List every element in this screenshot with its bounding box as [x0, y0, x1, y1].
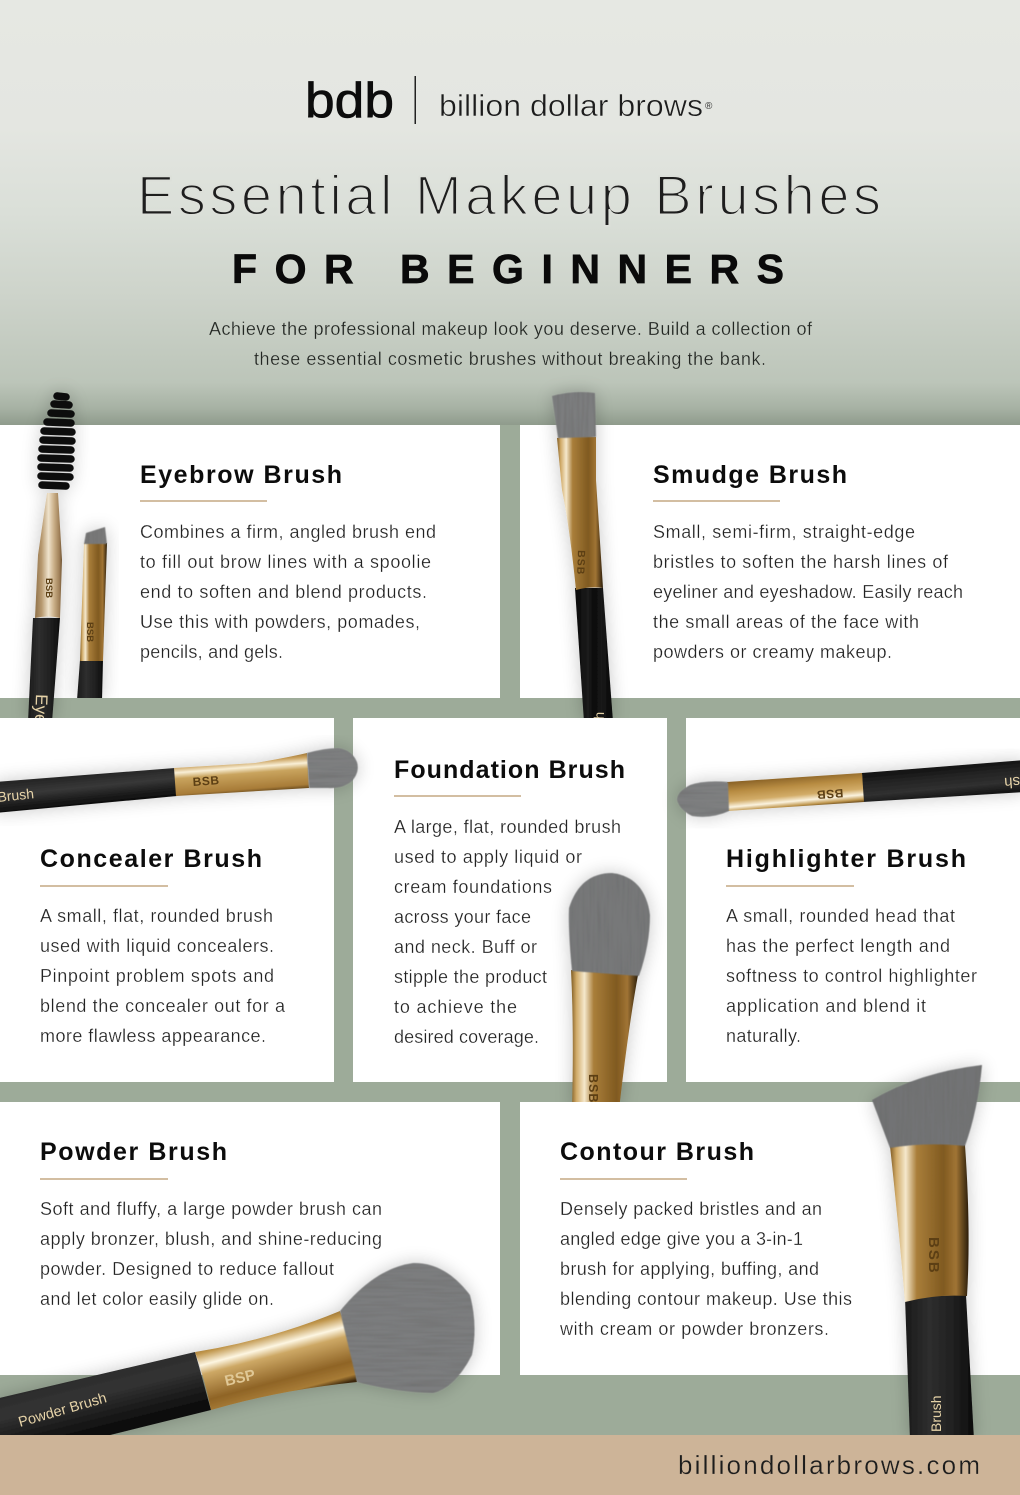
- panel: eyebrow brush: Use this with powders, pomades,: [140, 612, 420, 632]
- icon: powder brush: Powder Brush: [17, 1390, 109, 1431]
- panel: eyebrow brush: Eyebrow Brush: [140, 461, 342, 489]
- panel: powder brush: apply bronzer, blush, and shine-reducing: [40, 1229, 382, 1249]
- panel: foundation brush: stipple the product: [394, 967, 547, 987]
- intro text: these essential cosmetic brushes without breaking the bank.: [254, 349, 766, 369]
- panel: highlighter brush: A small, rounded head that: [726, 906, 955, 926]
- panel: concealer brush: blend the concealer out for a: [40, 996, 286, 1016]
- panel: foundation brush: across your face: [394, 907, 531, 927]
- icon: contour brush: BSB: [925, 1237, 942, 1275]
- panel: foundation brush: used to apply liquid or: [394, 847, 582, 867]
- icon: spoolie eyebrow brush: BSB: [43, 578, 54, 598]
- panel: foundation brush: desired coverage.: [394, 1027, 539, 1047]
- panel: contour brush: Densely packed bristles and an: [560, 1199, 822, 1219]
- panel: powder brush: and let color easily glide on.: [40, 1289, 274, 1309]
- panel: highlighter brush: application and blend it: [726, 996, 926, 1016]
- panel: foundation brush: and neck. Buff or: [394, 937, 537, 957]
- panel: eyebrow brush: to fill out brow lines with a spoolie: [140, 552, 431, 572]
- panel: smudge brush: the small areas of the face with: [653, 612, 919, 632]
- panel: eyebrow brush: [0, 425, 500, 698]
- panel: contour brush: blending contour makeup. Use this: [560, 1289, 852, 1309]
- icon: smudge brush: Smudge Brush: [588, 712, 607, 805]
- logo: bdb: [305, 74, 394, 128]
- panel: contour brush: Contour Brush: [560, 1138, 754, 1166]
- panel: foundation brush: cream foundations: [394, 877, 552, 897]
- panel: foundation brush: Foundation Brush: [394, 756, 625, 784]
- panel: concealer brush: A small, flat, rounded brush: [40, 906, 273, 926]
- panel: concealer brush: Pinpoint problem spots and: [40, 966, 274, 986]
- panel: contour brush: angled edge give you a 3-in-1: [560, 1229, 803, 1249]
- header gradient background: [0, 0, 1020, 425]
- intro text: [209, 319, 813, 369]
- footer bar: [0, 1435, 1020, 1495]
- logo: ®: [705, 101, 713, 112]
- icon: contour brush: Brush: [928, 1395, 944, 1432]
- panel: powder brush: Soft and fluffy, a large powder brush can: [40, 1199, 382, 1219]
- title: Essential Makeup Brushes: [137, 164, 881, 226]
- logo: [305, 74, 713, 128]
- panel: smudge brush: eyeliner and eyeshadow. Easily reach: [653, 582, 963, 602]
- icon: highlighter brush: BSB: [816, 786, 844, 802]
- panel: foundation brush: A large, flat, rounded brush: [394, 817, 621, 837]
- panel: contour brush: brush for applying, buffing, and: [560, 1259, 819, 1279]
- panel: powder brush: powder. Designed to reduce fallout: [40, 1259, 334, 1279]
- panel: powder brush: [0, 1102, 500, 1375]
- panel: smudge brush: powders or creamy makeup.: [653, 642, 892, 662]
- panel: concealer brush: [0, 718, 334, 1082]
- icon: powder brush: [0, 1263, 475, 1462]
- icon: smudge brush: BSB: [574, 550, 587, 575]
- panel: concealer brush: used with liquid concealers.: [40, 936, 274, 956]
- panel: smudge brush: bristles to soften the harsh lines of: [653, 552, 949, 572]
- panel: highlighter brush: Highlighter Brush: [726, 845, 966, 873]
- panel: eyebrow brush: end to soften and blend products.: [140, 582, 427, 602]
- panel: powder brush: Powder Brush: [40, 1138, 227, 1166]
- logo: billion dollar brows: [439, 88, 703, 123]
- panel: eyebrow brush: Combines a firm, angled brush end: [140, 522, 436, 542]
- panel: contour brush: [520, 1102, 1020, 1375]
- icon: foundation brush: BSB: [586, 1074, 600, 1103]
- icon: powder brush: BSP: [223, 1366, 257, 1390]
- icon: highlighter brush: [677, 760, 1020, 817]
- subtitle: FOR BEGINNERS: [232, 246, 784, 292]
- intro text: Achieve the professional makeup look you deserve. Build a collection of: [209, 319, 813, 339]
- panel: smudge brush: [520, 425, 1020, 698]
- icon: concealer brush: BSB: [192, 773, 220, 789]
- panel: highlighter brush: softness to control highlighter: [726, 966, 977, 986]
- panel: highlighter brush: has the perfect length and: [726, 936, 950, 956]
- panel: smudge brush: Smudge Brush: [653, 461, 847, 489]
- icon: contour brush: [872, 1065, 982, 1440]
- icon: spoolie eyebrow brush: Eyebrow: [30, 694, 51, 761]
- panel: concealer brush: more flawless appearance.: [40, 1026, 266, 1046]
- icon: foundation brush: [569, 873, 650, 1110]
- panel: foundation brush: to achieve the: [394, 997, 517, 1017]
- panel: smudge brush: Small, semi-firm, straight-edge: [653, 522, 915, 542]
- icon: smudge brush: [552, 392, 613, 805]
- icon: spoolie eyebrow brush: [28, 396, 72, 761]
- panel: eyebrow brush: pencils, and gels.: [140, 642, 283, 662]
- footer bar: billiondollarbrows.com: [678, 1450, 980, 1480]
- icon: concealer brush: [0, 748, 358, 813]
- panel: contour brush: with cream or powder bronzers.: [559, 1319, 829, 1339]
- icon: angled eyebrow brush: BSB: [84, 622, 95, 642]
- panel: highlighter brush: naturally.: [726, 1026, 801, 1046]
- panel: concealer brush: Concealer Brush: [40, 845, 262, 873]
- panel: highlighter brush: [686, 718, 1020, 1082]
- icon: angled eyebrow brush: [77, 527, 107, 700]
- panel: foundation brush: [353, 718, 667, 1082]
